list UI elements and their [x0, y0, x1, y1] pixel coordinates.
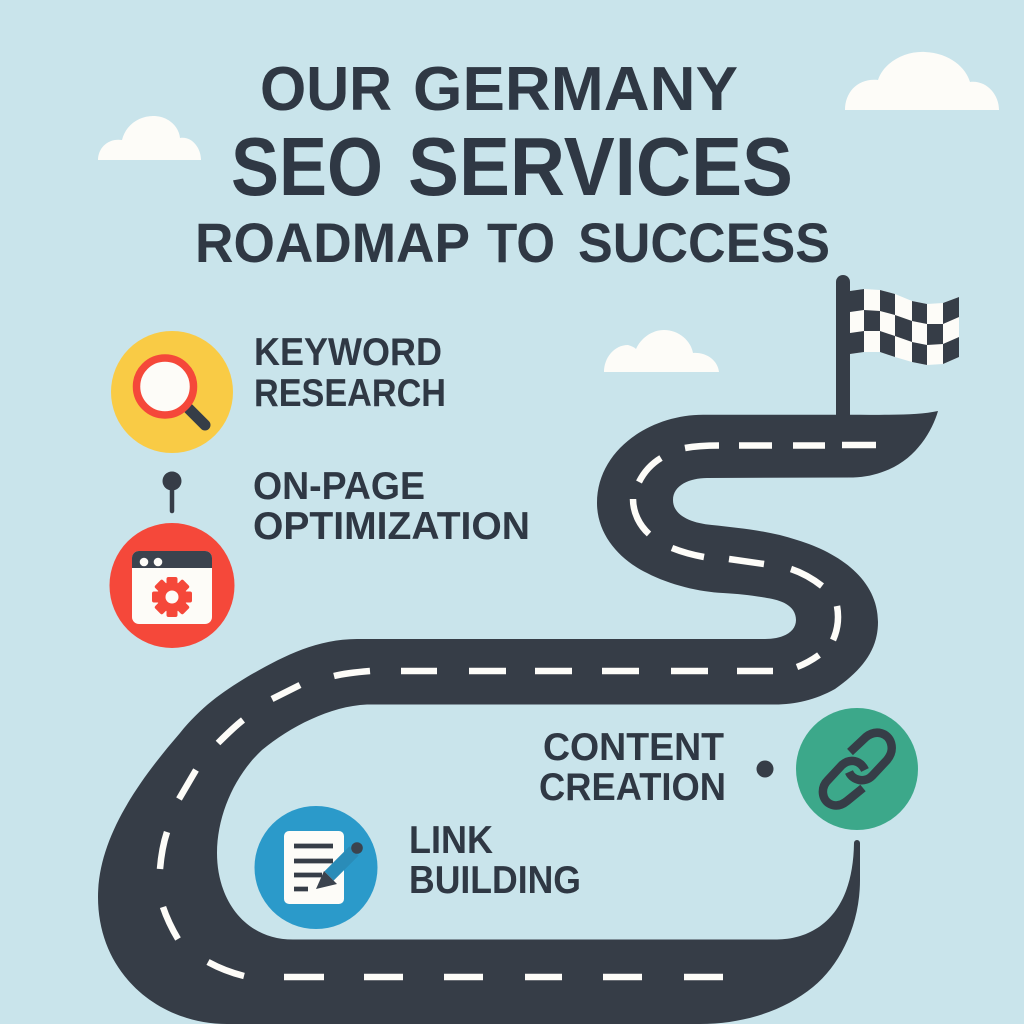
icon: link chain	[796, 708, 918, 830]
title: SERVICES	[408, 120, 793, 213]
cloud: top left	[98, 116, 201, 160]
connector pin	[162, 472, 182, 511]
title: SEO	[231, 120, 383, 213]
checkered cloth	[850, 289, 959, 365]
icon: content creation document and pencil	[254, 806, 378, 929]
title	[195, 55, 830, 274]
cloud: top right	[845, 52, 999, 110]
label: on-page optimization: ON-PAGE	[253, 465, 425, 508]
icon: on-page optimization browser gear	[110, 523, 234, 648]
label: keyword research: KEYWORD	[254, 331, 442, 374]
title: SUCCESS	[578, 211, 830, 274]
title: GERMANY	[413, 55, 738, 124]
label: on-page optimization	[253, 465, 530, 548]
finish flag	[836, 275, 959, 420]
label: keyword research	[254, 331, 446, 415]
title: ROADMAP	[195, 211, 470, 274]
label: content creation	[539, 726, 726, 809]
title: TO	[487, 211, 555, 274]
connector dot	[756, 760, 774, 778]
label: on-page optimization: OPTIMIZATION	[253, 505, 530, 548]
pencil	[316, 842, 363, 889]
road	[98, 411, 938, 1024]
title: OUR	[260, 55, 392, 124]
flag pole	[836, 275, 850, 420]
label: keyword research: RESEARCH	[254, 372, 446, 415]
road centre dashes	[160, 445, 876, 977]
gear	[152, 577, 192, 617]
label: link building	[409, 819, 581, 902]
label: link building: LINK	[409, 819, 493, 862]
label: content creation: CREATION	[539, 766, 726, 809]
label: content creation: CONTENT	[543, 726, 724, 769]
label: link building: BUILDING	[409, 859, 581, 902]
icon: keyword research magnifier	[111, 331, 233, 453]
cloud: middle	[604, 330, 719, 372]
